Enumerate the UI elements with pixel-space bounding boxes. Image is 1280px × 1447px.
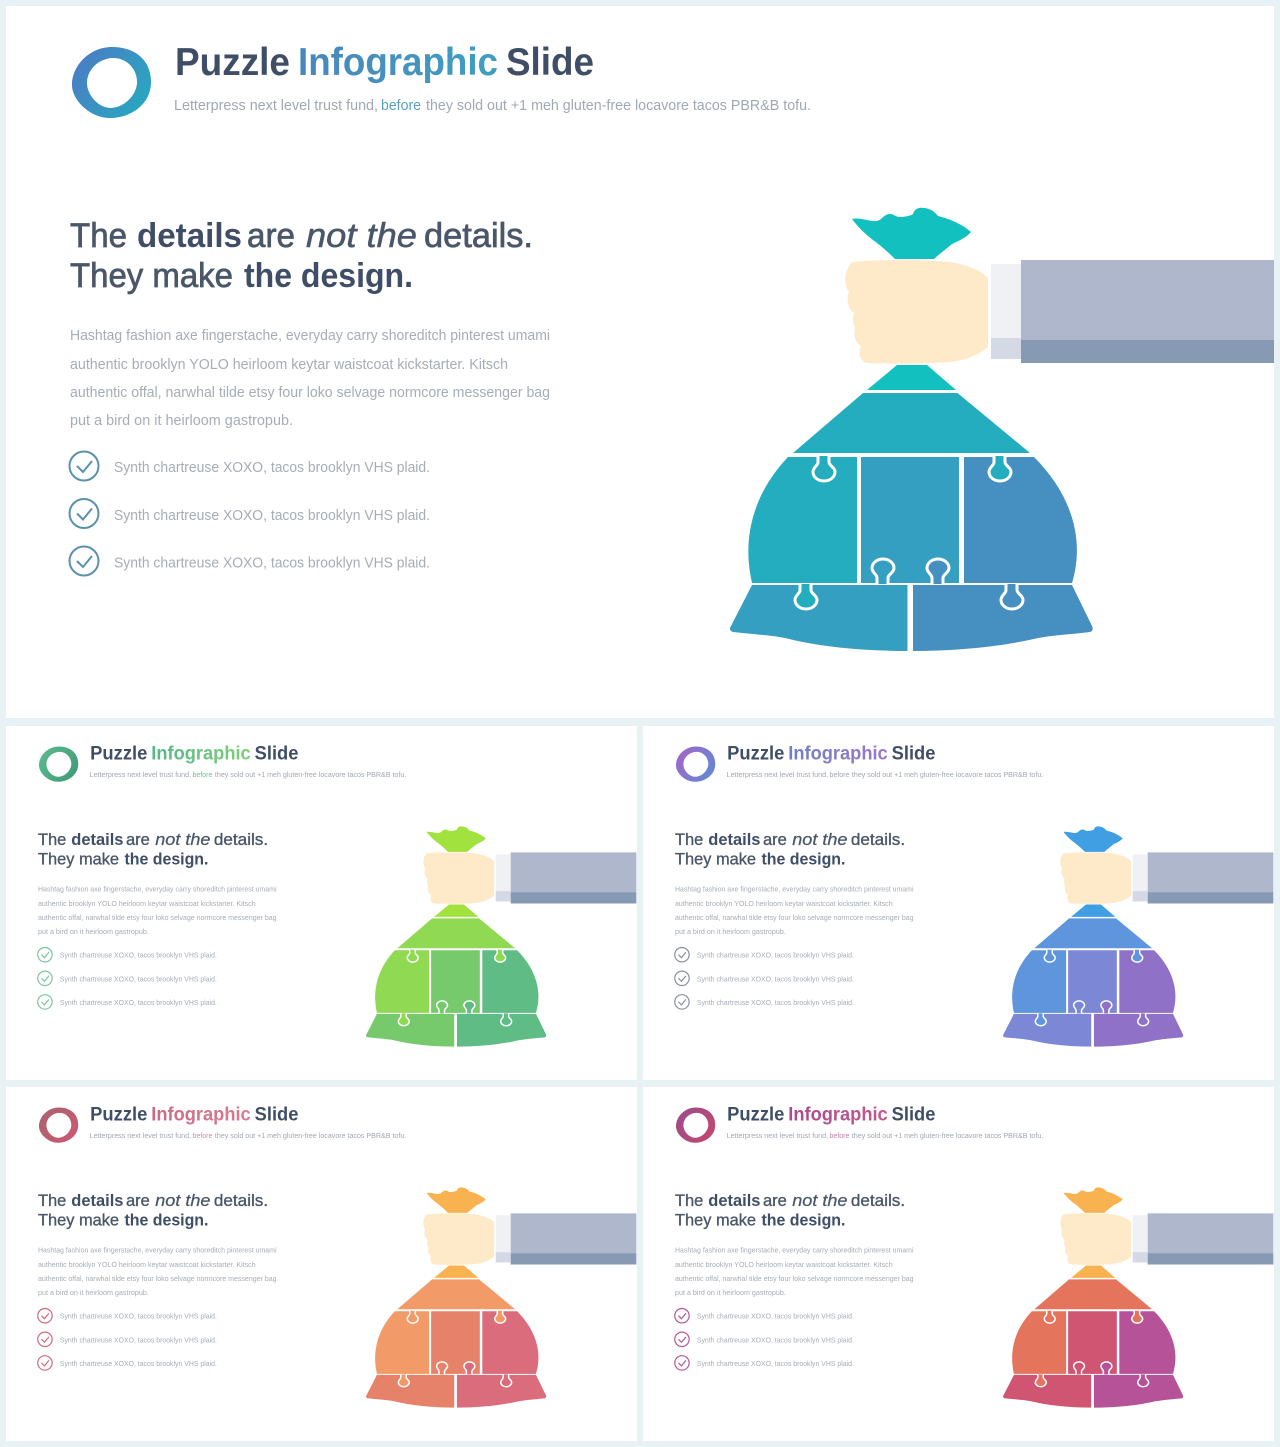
subtitle: Letterpress next level trust fund,: [90, 770, 191, 779]
title: Slide: [506, 41, 594, 84]
body text: Hashtag fashion axe fingerstache, everyday carry shoreditch pinterest umami: [675, 1246, 914, 1255]
subtitle: [727, 770, 1043, 779]
title: Infographic: [298, 41, 498, 84]
checklist: Synth chartreuse XOXO, tacos brooklyn VHS plaid.: [697, 951, 854, 960]
subtitle: before: [381, 98, 421, 114]
checklist: [675, 947, 854, 1009]
body text: [675, 1246, 914, 1297]
icon: green ring logo: [39, 746, 78, 782]
subtitle: they sold out +1 meh gluten-free locavore tacos PBR&B tofu.: [852, 770, 1043, 779]
subtitle: they sold out +1 meh gluten-free locavore tacos PBR&B tofu.: [215, 1131, 406, 1140]
title: Infographic: [151, 1103, 251, 1125]
heading: the design.: [124, 850, 208, 869]
heading: the design.: [761, 1211, 845, 1230]
title: [175, 41, 594, 84]
heading: [675, 830, 905, 869]
subtitle: they sold out +1 meh gluten-free locavore tacos PBR&B tofu.: [426, 98, 811, 114]
heading: are: [126, 830, 150, 849]
subtitle: Letterpress next level trust fund,: [90, 1131, 191, 1140]
checklist: Synth chartreuse XOXO, tacos brooklyn VHS plaid.: [697, 1336, 854, 1345]
panel: orange slide: [6, 1087, 637, 1441]
body text: put a bird on it heirloom gastropub.: [675, 927, 786, 936]
subtitle: [174, 98, 811, 114]
title: Puzzle: [90, 1103, 148, 1125]
body text: authentic offal, narwhal tilde etsy four loko selvage normcore messenger bag: [38, 1274, 277, 1283]
heading: They make: [70, 257, 233, 295]
checklist: Synth chartreuse XOXO, tacos brooklyn VHS plaid.: [697, 975, 854, 984]
panel: purple slide: [643, 726, 1274, 1080]
checklist: Synth chartreuse XOXO, tacos brooklyn VHS plaid.: [114, 556, 430, 572]
title: [90, 1103, 299, 1125]
subtitle: before: [193, 770, 212, 779]
heading: They make: [38, 1211, 119, 1230]
body text: authentic brooklyn YOLO heirloom keytar waistcoat kickstarter. Kitsch: [38, 899, 256, 908]
body text: put a bird on it heirloom gastropub.: [38, 1288, 149, 1297]
heading: details.: [851, 1191, 905, 1210]
checklist: Synth chartreuse XOXO, tacos brooklyn VHS plaid.: [697, 1312, 854, 1321]
heading: details: [708, 1191, 760, 1210]
body text: [675, 885, 914, 936]
body text: Hashtag fashion axe fingerstache, everyday carry shoreditch pinterest umami: [38, 1246, 277, 1255]
heading: The: [675, 830, 703, 849]
body text: authentic offal, narwhal tilde etsy four loko selvage normcore messenger bag: [675, 1274, 914, 1283]
body text: authentic offal, narwhal tilde etsy four loko selvage normcore messenger bag: [38, 913, 277, 922]
heading: not the: [792, 1191, 847, 1210]
body text: put a bird on it heirloom gastropub.: [70, 413, 293, 429]
checklist: Synth chartreuse XOXO, tacos brooklyn VHS plaid.: [60, 1359, 217, 1368]
title: [727, 742, 936, 764]
heading: The: [70, 217, 127, 255]
title: [727, 1103, 936, 1125]
icon: red ring logo: [39, 1107, 78, 1143]
checklist: Synth chartreuse XOXO, tacos brooklyn VHS plaid.: [60, 998, 217, 1007]
subtitle: they sold out +1 meh gluten-free locavore tacos PBR&B tofu.: [852, 1131, 1043, 1140]
body text: put a bird on it heirloom gastropub.: [675, 1288, 786, 1297]
body text: authentic offal, narwhal tilde etsy four loko selvage normcore messenger bag: [70, 385, 550, 401]
title: Slide: [892, 742, 936, 764]
heading: details.: [214, 830, 268, 849]
heading: details.: [851, 830, 905, 849]
icon: magenta ring logo: [676, 1107, 715, 1143]
subtitle: Letterpress next level trust fund,: [174, 98, 378, 114]
checklist: [38, 947, 217, 1009]
checklist: Synth chartreuse XOXO, tacos brooklyn VHS plaid.: [697, 1359, 854, 1368]
heading: details: [71, 1191, 123, 1210]
title: Slide: [892, 1103, 936, 1125]
heading: details.: [424, 217, 533, 255]
heading: details.: [214, 1191, 268, 1210]
subtitle: before: [830, 1131, 849, 1140]
checklist: Synth chartreuse XOXO, tacos brooklyn VHS plaid.: [60, 1336, 217, 1345]
title: Infographic: [788, 1103, 888, 1125]
illustration: hand holding puzzle bag: [1003, 826, 1273, 1047]
subtitle: [90, 770, 406, 779]
body text: Hashtag fashion axe fingerstache, everyday carry shoreditch pinterest umami: [675, 885, 914, 894]
body text: authentic offal, narwhal tilde etsy four loko selvage normcore messenger bag: [675, 913, 914, 922]
heading: not the: [792, 830, 847, 849]
checklist: Synth chartreuse XOXO, tacos brooklyn VHS plaid.: [114, 508, 430, 524]
heading: are: [247, 217, 295, 255]
panel: main blue slide: [6, 6, 1274, 718]
title: Puzzle: [727, 1103, 785, 1125]
body text: put a bird on it heirloom gastropub.: [38, 927, 149, 936]
title: Infographic: [151, 742, 251, 764]
illustration: hand holding puzzle bag: [1003, 1187, 1273, 1408]
body text: [38, 1246, 277, 1297]
checklist: Synth chartreuse XOXO, tacos brooklyn VHS plaid.: [114, 460, 430, 476]
title: Puzzle: [727, 742, 785, 764]
title: Infographic: [788, 742, 888, 764]
heading: not the: [155, 830, 210, 849]
panel: magenta slide: [643, 1087, 1274, 1441]
heading: the design.: [124, 1211, 208, 1230]
heading: are: [763, 830, 787, 849]
heading: details: [708, 830, 760, 849]
subtitle: [727, 1131, 1043, 1140]
illustration: hand holding puzzle bag: [366, 826, 636, 1047]
checklist: Synth chartreuse XOXO, tacos brooklyn VHS plaid.: [60, 975, 217, 984]
checklist: Synth chartreuse XOXO, tacos brooklyn VHS plaid.: [60, 951, 217, 960]
heading: The: [675, 1191, 703, 1210]
heading: They make: [38, 850, 119, 869]
heading: are: [126, 1191, 150, 1210]
body text: [38, 885, 277, 936]
heading: [70, 217, 533, 295]
panel: green slide: [6, 726, 637, 1080]
checklist: [38, 1308, 217, 1370]
heading: not the: [306, 217, 417, 255]
heading: The: [38, 1191, 66, 1210]
heading: the design.: [244, 257, 413, 295]
checklist: Synth chartreuse XOXO, tacos brooklyn VHS plaid.: [60, 1312, 217, 1321]
body text: authentic brooklyn YOLO heirloom keytar waistcoat kickstarter. Kitsch: [675, 1260, 893, 1269]
body text: [70, 328, 550, 429]
illustration: hand holding puzzle bag: [730, 208, 1274, 651]
title: [90, 742, 299, 764]
icon: purple ring logo: [676, 746, 715, 782]
body text: authentic brooklyn YOLO heirloom keytar waistcoat kickstarter. Kitsch: [38, 1260, 256, 1269]
checklist: [675, 1308, 854, 1370]
subtitle: they sold out +1 meh gluten-free locavore tacos PBR&B tofu.: [215, 770, 406, 779]
illustration: hand holding puzzle bag: [366, 1187, 636, 1408]
heading: not the: [155, 1191, 210, 1210]
subtitle: [90, 1131, 406, 1140]
body text: Hashtag fashion axe fingerstache, everyday carry shoreditch pinterest umami: [70, 328, 550, 344]
body text: authentic brooklyn YOLO heirloom keytar waistcoat kickstarter. Kitsch: [675, 899, 893, 908]
subtitle: Letterpress next level trust fund,: [727, 770, 828, 779]
heading: the design.: [761, 850, 845, 869]
title: Slide: [255, 742, 299, 764]
checklist: Synth chartreuse XOXO, tacos brooklyn VHS plaid.: [697, 998, 854, 1007]
heading: [675, 1191, 905, 1230]
body text: Hashtag fashion axe fingerstache, everyday carry shoreditch pinterest umami: [38, 885, 277, 894]
title: Slide: [255, 1103, 299, 1125]
checklist: [70, 452, 430, 576]
body text: authentic brooklyn YOLO heirloom keytar waistcoat kickstarter. Kitsch: [70, 357, 508, 373]
heading: They make: [675, 850, 756, 869]
icon: blue ring logo: [72, 47, 151, 118]
heading: are: [763, 1191, 787, 1210]
heading: details: [137, 217, 242, 255]
title: Puzzle: [90, 742, 148, 764]
heading: [38, 830, 268, 869]
title: Puzzle: [175, 41, 290, 84]
heading: They make: [675, 1211, 756, 1230]
heading: The: [38, 830, 66, 849]
heading: [38, 1191, 268, 1230]
subtitle: before: [830, 770, 849, 779]
subtitle: Letterpress next level trust fund,: [727, 1131, 828, 1140]
subtitle: before: [193, 1131, 212, 1140]
heading: details: [71, 830, 123, 849]
